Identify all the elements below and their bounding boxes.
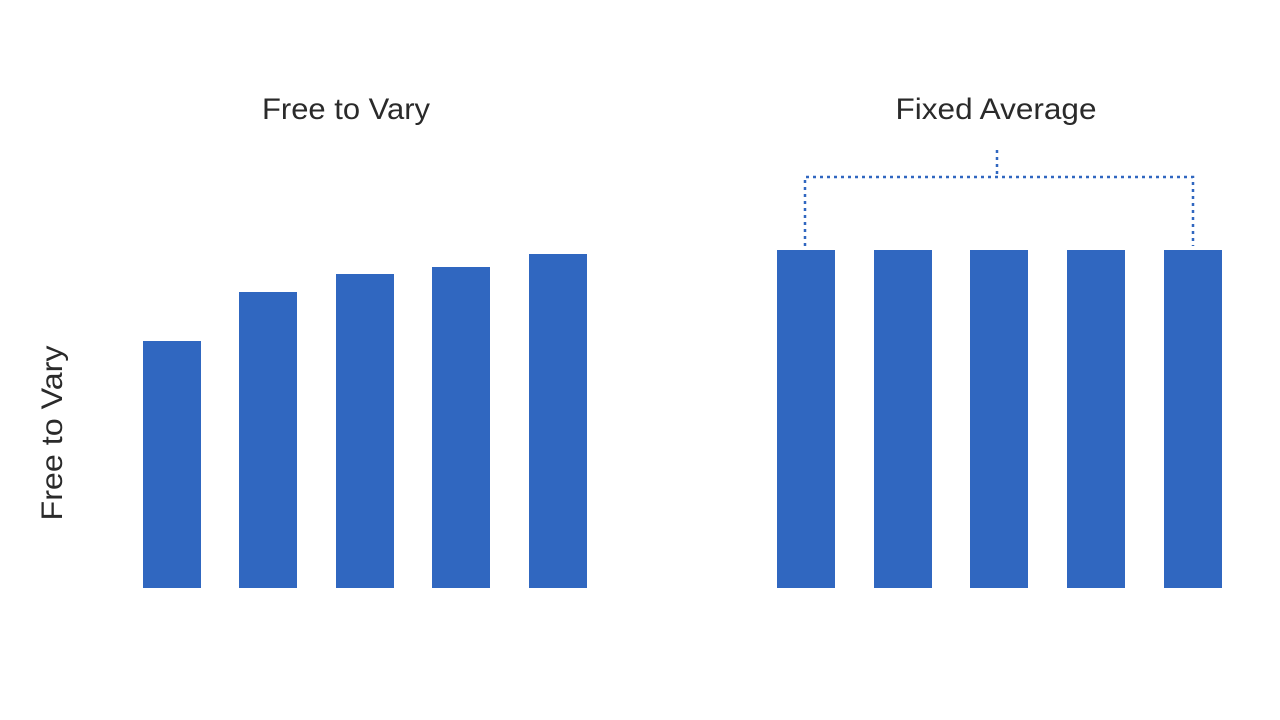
axis label: Free to Vary: Free to Vary — [36, 346, 69, 520]
bar chart: free to vary — [143, 254, 587, 588]
bracket: dotted average connector — [805, 150, 1193, 246]
title: Free to Vary: Free to Vary — [262, 93, 430, 126]
bar chart: fixed average — [777, 250, 1222, 588]
title: Fixed Average: Fixed Average — [896, 93, 1096, 126]
